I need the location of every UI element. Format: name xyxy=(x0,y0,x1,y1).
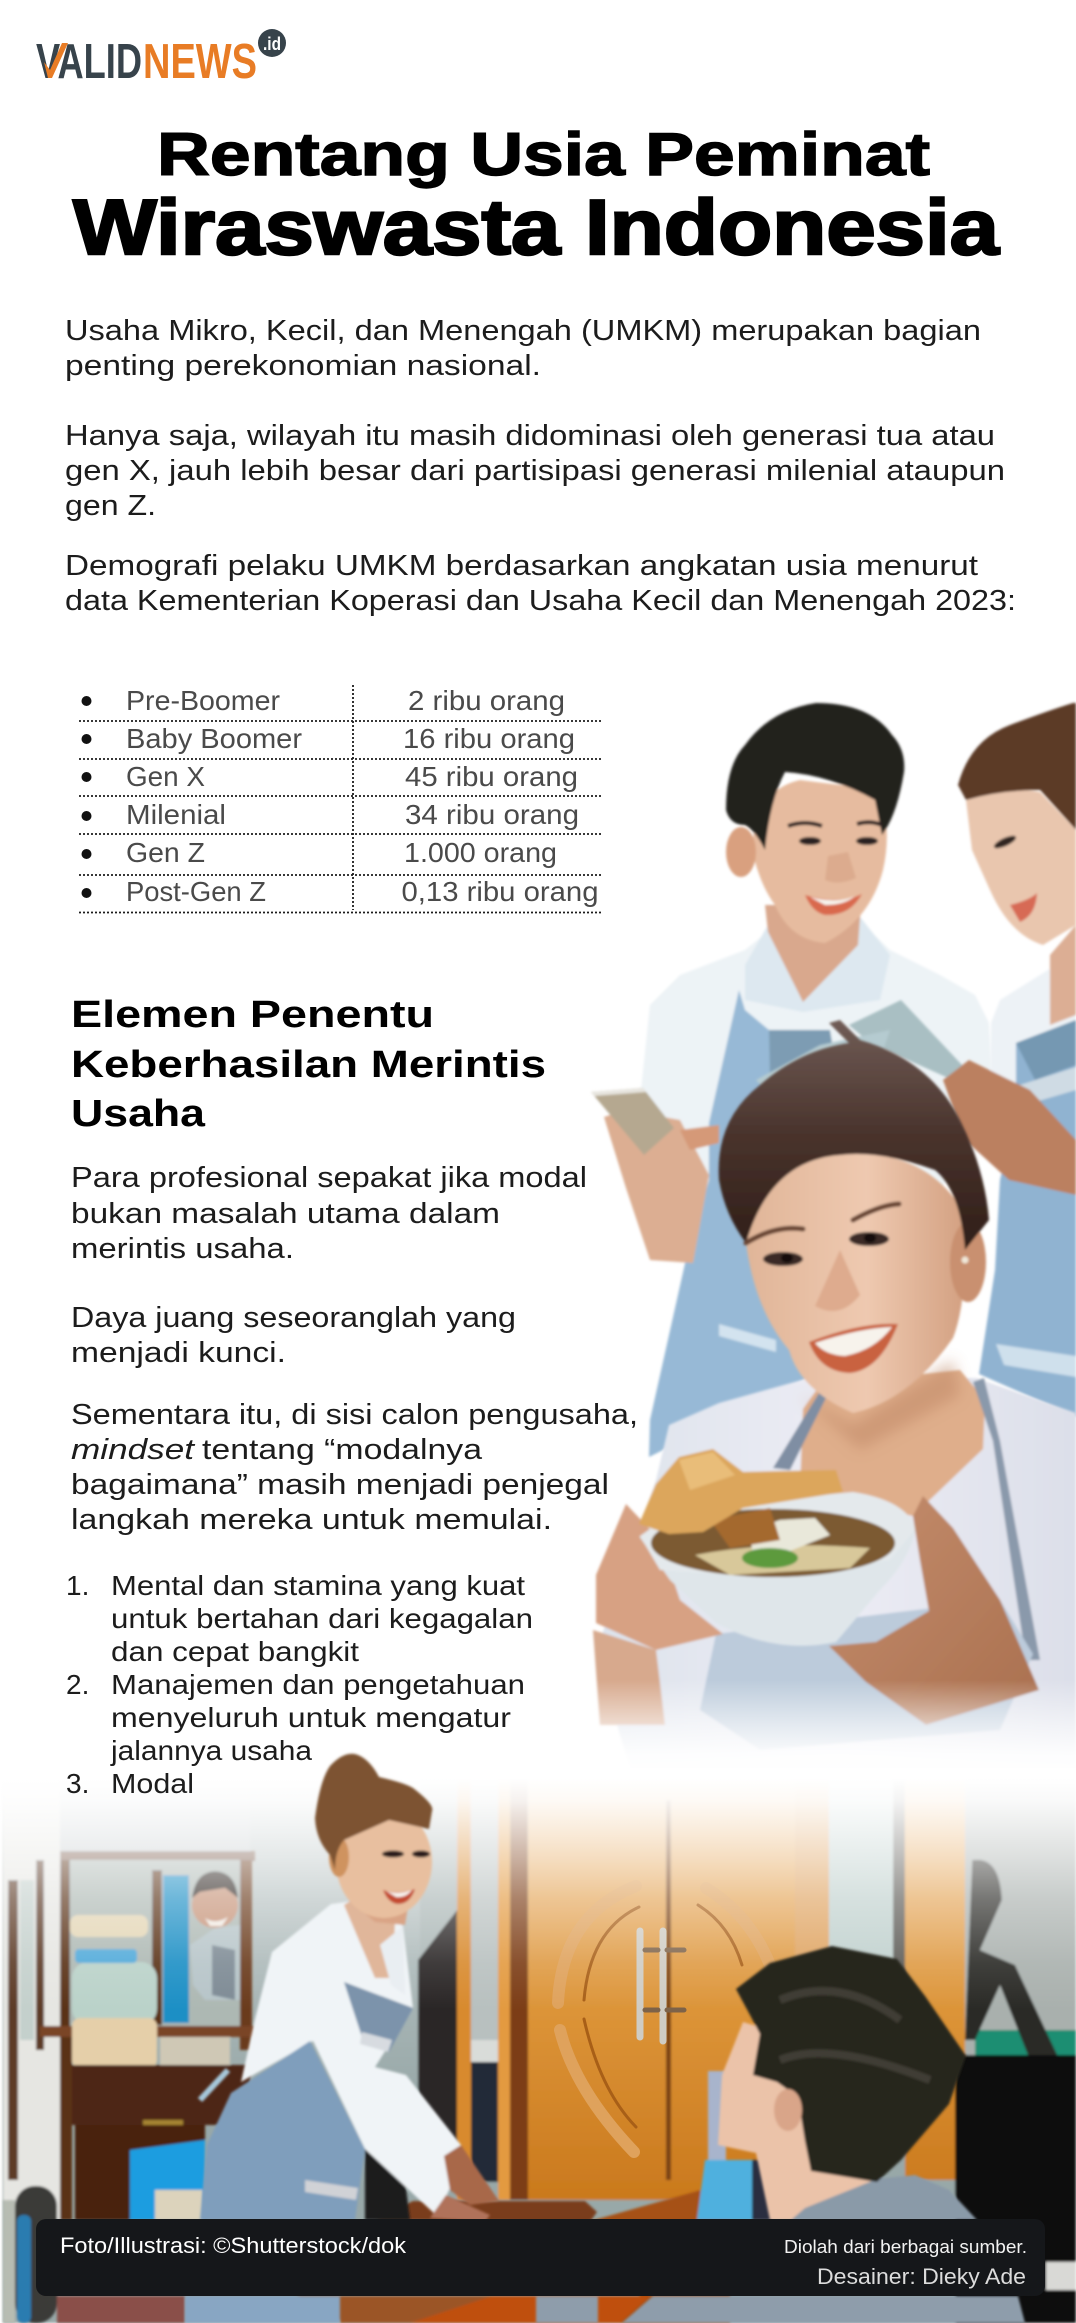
white fade under the portraits xyxy=(0,1680,1076,1780)
person: seated customer seen from behind xyxy=(536,1946,1025,2323)
photo: noodle stall scene xyxy=(0,1754,1076,2323)
section body text: bagaimana” masih menjadi penjegal xyxy=(71,1469,609,1501)
wall and door background xyxy=(3,1778,1076,2323)
intro text: Demografi pelaku UMKM berdasarkan angkatan usia menurut xyxy=(65,550,978,582)
numbered list: untuk bertahan dari kegagalan xyxy=(111,1603,533,1634)
demographic table: 1.000 orang xyxy=(404,837,557,868)
demographic table: 34 ribu orang xyxy=(405,799,579,830)
demographic table: 16 ribu orang xyxy=(403,723,575,754)
logo: Validnews.id: VALID xyxy=(36,35,142,89)
intro text: penting perekonomian nasional. xyxy=(65,350,541,382)
numbered list xyxy=(66,1570,533,1799)
footer credit bar: Diolah dari berbagai sumber. xyxy=(784,2237,1027,2257)
demographic table xyxy=(79,685,603,912)
numbered list: dan cepat bangkit xyxy=(111,1636,359,1667)
door arches and handles xyxy=(558,1886,770,2152)
person: woman looking down at tablet xyxy=(756,703,1076,1417)
section body text: langkah mereka untuk memulai. xyxy=(71,1504,552,1536)
demographic table: Pre-Boomer xyxy=(126,685,280,716)
numbered list: Mental dan stamina yang kuat xyxy=(111,1570,525,1601)
numbered list: Manajemen dan pengetahuan xyxy=(111,1669,525,1700)
section body text: Para profesional sepakat jika modal xyxy=(71,1162,587,1194)
numbered list: 1. xyxy=(66,1570,89,1601)
person: man in apron xyxy=(591,703,994,1457)
logo: Validnews.id: .id xyxy=(263,34,281,54)
section body text: Sementara itu, di sisi calon pengusaha, xyxy=(71,1399,638,1431)
section body text: menjadi kunci. xyxy=(71,1337,286,1369)
demographic table: Gen X xyxy=(126,761,205,792)
photo: two staff and woman holding noodle bowl xyxy=(0,703,1076,1790)
section heading: Keberhasilan Merintis xyxy=(71,1044,546,1086)
numbered list: 2. xyxy=(66,1669,89,1700)
demographic table: 45 ribu orang xyxy=(405,761,578,792)
section body text: tentang “modalnya xyxy=(202,1434,483,1466)
intro text: Hanya saja, wilayah itu masih didominasi oleh generasi tua atau xyxy=(65,420,995,452)
numbered list: Modal xyxy=(111,1768,194,1799)
demographic table: 0,13 ribu orang xyxy=(402,876,598,907)
intro text xyxy=(65,315,1016,617)
section heading xyxy=(71,994,546,1135)
section heading: Usaha xyxy=(71,1093,206,1135)
food cart xyxy=(3,1780,255,2323)
demographic table: 2 ribu orang xyxy=(408,685,565,716)
intro text: data Kementerian Koperasi dan Usaha Kecil dan Menengah 2023: xyxy=(65,585,1016,617)
demographic table: Milenial xyxy=(126,799,226,830)
section body text: mindset xyxy=(71,1434,196,1466)
demographic table: Baby Boomer xyxy=(126,723,302,754)
intro text: Usaha Mikro, Kecil, dan Menengah (UMKM) merupakan bagian xyxy=(65,315,981,347)
demographic table: Post-Gen Z xyxy=(126,876,266,907)
table, tray and water bottle xyxy=(296,2071,772,2323)
person: smiling woman holding bowl of noodles xyxy=(593,1020,1076,1790)
logo: Validnews.id: NEWS xyxy=(143,35,257,89)
numbered list: menyeluruh untuk mengatur xyxy=(111,1702,511,1733)
demographic table: Gen Z xyxy=(126,837,205,868)
section body text xyxy=(71,1162,638,1536)
intro text: gen X, jauh lebih besar dari partisipasi generasi milenial ataupun xyxy=(65,455,1005,487)
logo: Validnews.id xyxy=(36,29,286,89)
intro text: gen Z. xyxy=(65,490,156,522)
white fade over top of scene xyxy=(0,1768,1076,2010)
section heading: Elemen Penentu xyxy=(71,994,434,1036)
title: Rentang Usia Peminat xyxy=(157,121,930,188)
footer credit bar xyxy=(36,2219,1045,2296)
numbered list: jalannya usaha xyxy=(110,1735,312,1766)
footer credit bar: Foto/Illustrasi: ©Shutterstock/dok xyxy=(60,2233,407,2258)
person: waitress serving tray xyxy=(185,1754,499,2323)
numbered list: 3. xyxy=(66,1768,89,1799)
title xyxy=(73,121,1000,271)
footer credit bar: Desainer: Dieky Ade xyxy=(817,2264,1026,2289)
section body text: bukan masalah utama dalam xyxy=(71,1198,500,1230)
section body text: merintis usaha. xyxy=(71,1233,294,1265)
title: Wiraswasta Indonesia xyxy=(73,183,1000,271)
section body text: Daya juang seseoranglah yang xyxy=(71,1302,516,1334)
